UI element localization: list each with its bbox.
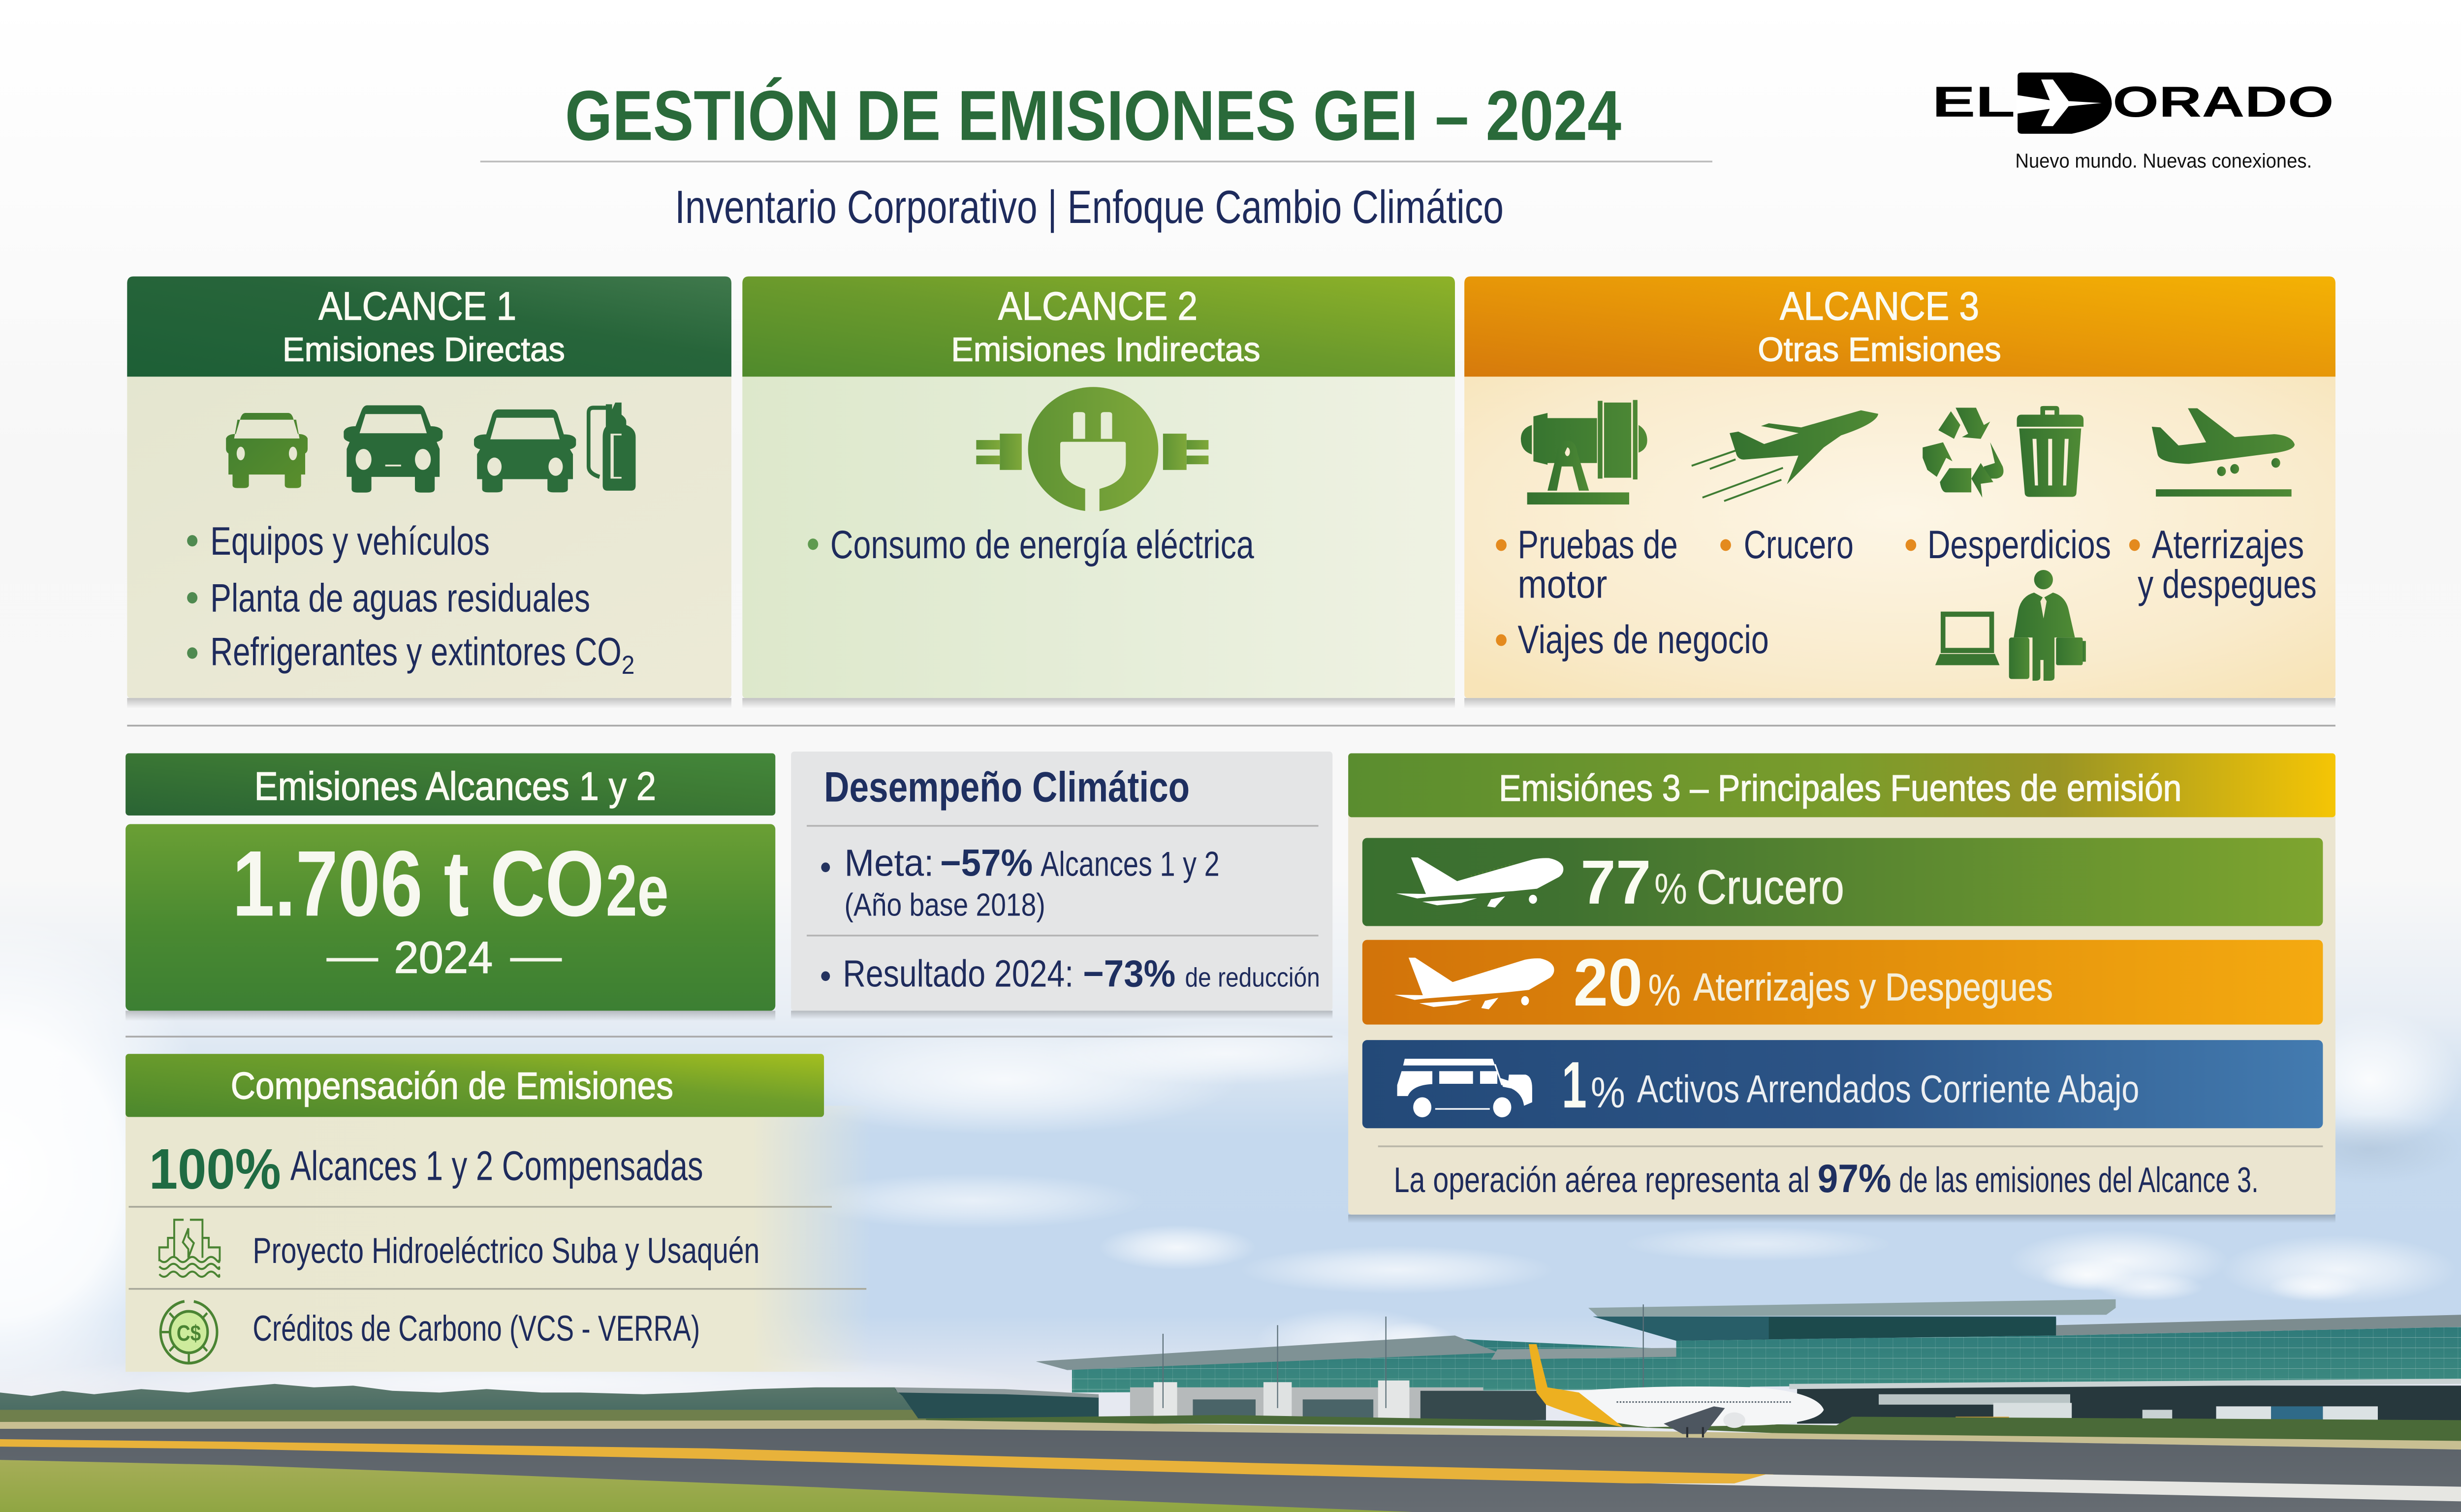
panel: Compensación de Emisiones [126, 1054, 871, 1372]
icon: trash bin [2017, 406, 2083, 497]
goal line: (Año base 2018) [845, 887, 1045, 923]
logo D mark with plane [2017, 72, 2112, 134]
yellow tail [1529, 1344, 1623, 1427]
note: La operación aérea representa al [1394, 1160, 1810, 1200]
panel: Emisiones 3 principal sources [1348, 753, 2335, 1223]
panel header [1464, 277, 2335, 377]
panel: Alcance 3 [1464, 277, 2335, 708]
title: GESTIÓN DE EMISIONES GEI – 2024 [565, 77, 1621, 156]
icon: van white [1397, 1059, 1532, 1117]
airplane on apron [1529, 1344, 1824, 1438]
bar: crucero [1362, 838, 2323, 926]
icon: plane white [1394, 958, 1554, 1009]
panel body [1464, 363, 2335, 698]
big number: 1.706 t CO [232, 832, 604, 936]
heading: ALCANCE 2 [998, 284, 1198, 328]
panel: Alcance 1 [127, 277, 731, 708]
small left building [895, 1387, 1099, 1418]
icon: hydroelectric project [159, 1220, 220, 1277]
white runway stripe [1648, 1475, 2461, 1501]
value: 1 [1562, 1049, 1587, 1122]
panel: Emisiones Alcances 1 y 2 header [126, 753, 775, 816]
list: Alcance 3: Viajes de negocio [1518, 618, 1769, 662]
panel body [742, 363, 1455, 698]
logo wordmark left: EL [1932, 77, 2015, 126]
list: Alcance 1 [187, 519, 634, 680]
lower concrete section [1130, 1381, 1546, 1420]
bar: crucero: Crucero [1697, 860, 1844, 914]
left terminal roof [1036, 1335, 1711, 1370]
goal line: −57% [940, 842, 1033, 884]
panel body [1348, 778, 2335, 1215]
icon: electric plug [976, 387, 1208, 512]
list: Alcance 3 [1496, 523, 2317, 662]
icon: car [344, 406, 442, 493]
panel header: Compensación de Emisiones [231, 1064, 673, 1107]
grass foreground [0, 1460, 1413, 1512]
result line: de reducción [1185, 963, 1320, 993]
text: carbon credits: Créditos de Carbono (VCS - VERRA) [252, 1308, 700, 1349]
list: Alcance 2: Consumo de energía eléctrica [830, 523, 1254, 567]
runway [0, 1429, 2461, 1512]
left terminal glass [1072, 1339, 1750, 1392]
logo: El Dorado [1932, 72, 2334, 172]
list: Alcance 3: Crucero [1744, 523, 1854, 567]
lower right section [1789, 1379, 2461, 1432]
list: Alcance 3: Pruebas de [1518, 523, 1678, 567]
icon: suv [474, 410, 576, 492]
icon: carbon credits [160, 1301, 217, 1363]
list: Alcance 3: y despegues [2138, 562, 2317, 606]
panel header [742, 277, 1455, 377]
100 percent line [149, 1137, 703, 1201]
value: 20 [1574, 945, 1642, 1020]
panel: Desempeño Climático [791, 752, 1332, 1019]
vegetation strip [926, 1415, 2461, 1443]
fuselage [1546, 1386, 1824, 1427]
year [326, 933, 562, 982]
panel: Alcance 2 [742, 277, 1455, 708]
icon: truck [226, 413, 308, 488]
note [1394, 1157, 2259, 1201]
result line [821, 952, 1320, 995]
bar: activos arrendados [1362, 1040, 2323, 1128]
icon: fire extinguisher [589, 403, 635, 491]
list: Alcance 3: Aterrizajes [2152, 523, 2304, 567]
logo wordmark right: ORADO [2113, 77, 2334, 126]
sub heading: Emisiones Indirectas [951, 331, 1261, 368]
heading: Desempeño Climático [824, 764, 1190, 811]
sub heading: Otras Emisiones [1758, 331, 2001, 368]
pale runway shoulder [0, 1420, 2461, 1449]
icon: carbon credits: C$ [177, 1321, 201, 1346]
panel header [1348, 753, 2335, 817]
list: Alcance 3: motor [1518, 562, 1607, 606]
yellow runway stripe [0, 1439, 1773, 1483]
heading: ALCANCE 1 [318, 284, 516, 328]
big number: 2e [606, 850, 668, 931]
panel body [126, 1106, 871, 1372]
right terminal glass [1676, 1315, 2461, 1387]
list: Alcance 1: Planta de aguas residuales [210, 576, 590, 620]
ground, runway and grass [0, 1415, 2461, 1512]
note: de las emisiones del Alcance 3. [1899, 1160, 2259, 1200]
bar: activos arrendados: Activos Arrendados Corriente Abajo [1637, 1067, 2139, 1110]
100 percent line: 100% [149, 1137, 281, 1201]
panel: total emissions value [126, 824, 775, 1021]
list: Alcance 1: Refrigerantes y extintores CO [210, 630, 622, 674]
panel header [127, 277, 731, 377]
bar: crucero: % [1654, 864, 1687, 913]
icon: business traveller [2009, 570, 2086, 681]
bar: activos arrendados: % [1591, 1069, 1625, 1117]
icon: plane landing [2152, 408, 2295, 497]
bar: aterrizajes y despegues [1362, 940, 2323, 1025]
icon: plane white [1396, 857, 1563, 908]
light poles [1163, 1304, 1643, 1408]
sub heading: Emisiones Directas [283, 331, 565, 368]
bar: aterrizajes y despegues: Aterrizajes y Despegues [1694, 965, 2053, 1008]
icon: engine test stand [1521, 400, 1647, 504]
panel body [127, 363, 731, 698]
goal line: Meta: [845, 842, 934, 884]
value: 77 [1580, 848, 1651, 917]
bar: aterrizajes y despegues: % [1648, 965, 1681, 1015]
subtitle: Inventario Corporativo | Enfoque Cambio Climático [675, 181, 1504, 233]
panel: Emisiones Alcances 1 y 2 header: Emisiones Alcances 1 y 2 [254, 764, 656, 809]
icon: plane taking off [1692, 410, 1878, 501]
distant hills [0, 1384, 926, 1423]
logo tagline: Nuevo mundo. Nuevas conexiones. [2015, 150, 2312, 172]
wing and engine [1664, 1406, 1745, 1438]
note: 97% [1818, 1157, 1891, 1201]
goal line [821, 842, 1220, 923]
list: Alcance 3: Desperdicios [1927, 523, 2111, 567]
100 percent line: Alcances 1 y 2 Compensadas [290, 1143, 703, 1189]
panel header: Emisiónes 3 – Principales Fuentes de emisión [1499, 768, 2181, 809]
goal line: Alcances 1 y 2 [1041, 845, 1220, 883]
icon: laptop [1935, 614, 1999, 665]
result line: Resultado 2024: [843, 952, 1073, 995]
heading: ALCANCE 3 [1780, 284, 1979, 328]
main tower roof and body [1588, 1299, 2115, 1341]
panel header [126, 1054, 824, 1117]
icon: recycle symbol [1923, 408, 2003, 498]
text: hydro project: Proyecto Hidroeléctrico Suba y Usaquén [252, 1230, 759, 1271]
result line: −73% [1083, 952, 1175, 995]
list: Alcance 1: 2 [622, 650, 634, 680]
year: 2024 [394, 933, 493, 982]
list: Alcance 1: Equipos y vehículos [210, 519, 490, 564]
airport terminal [895, 1299, 2461, 1432]
